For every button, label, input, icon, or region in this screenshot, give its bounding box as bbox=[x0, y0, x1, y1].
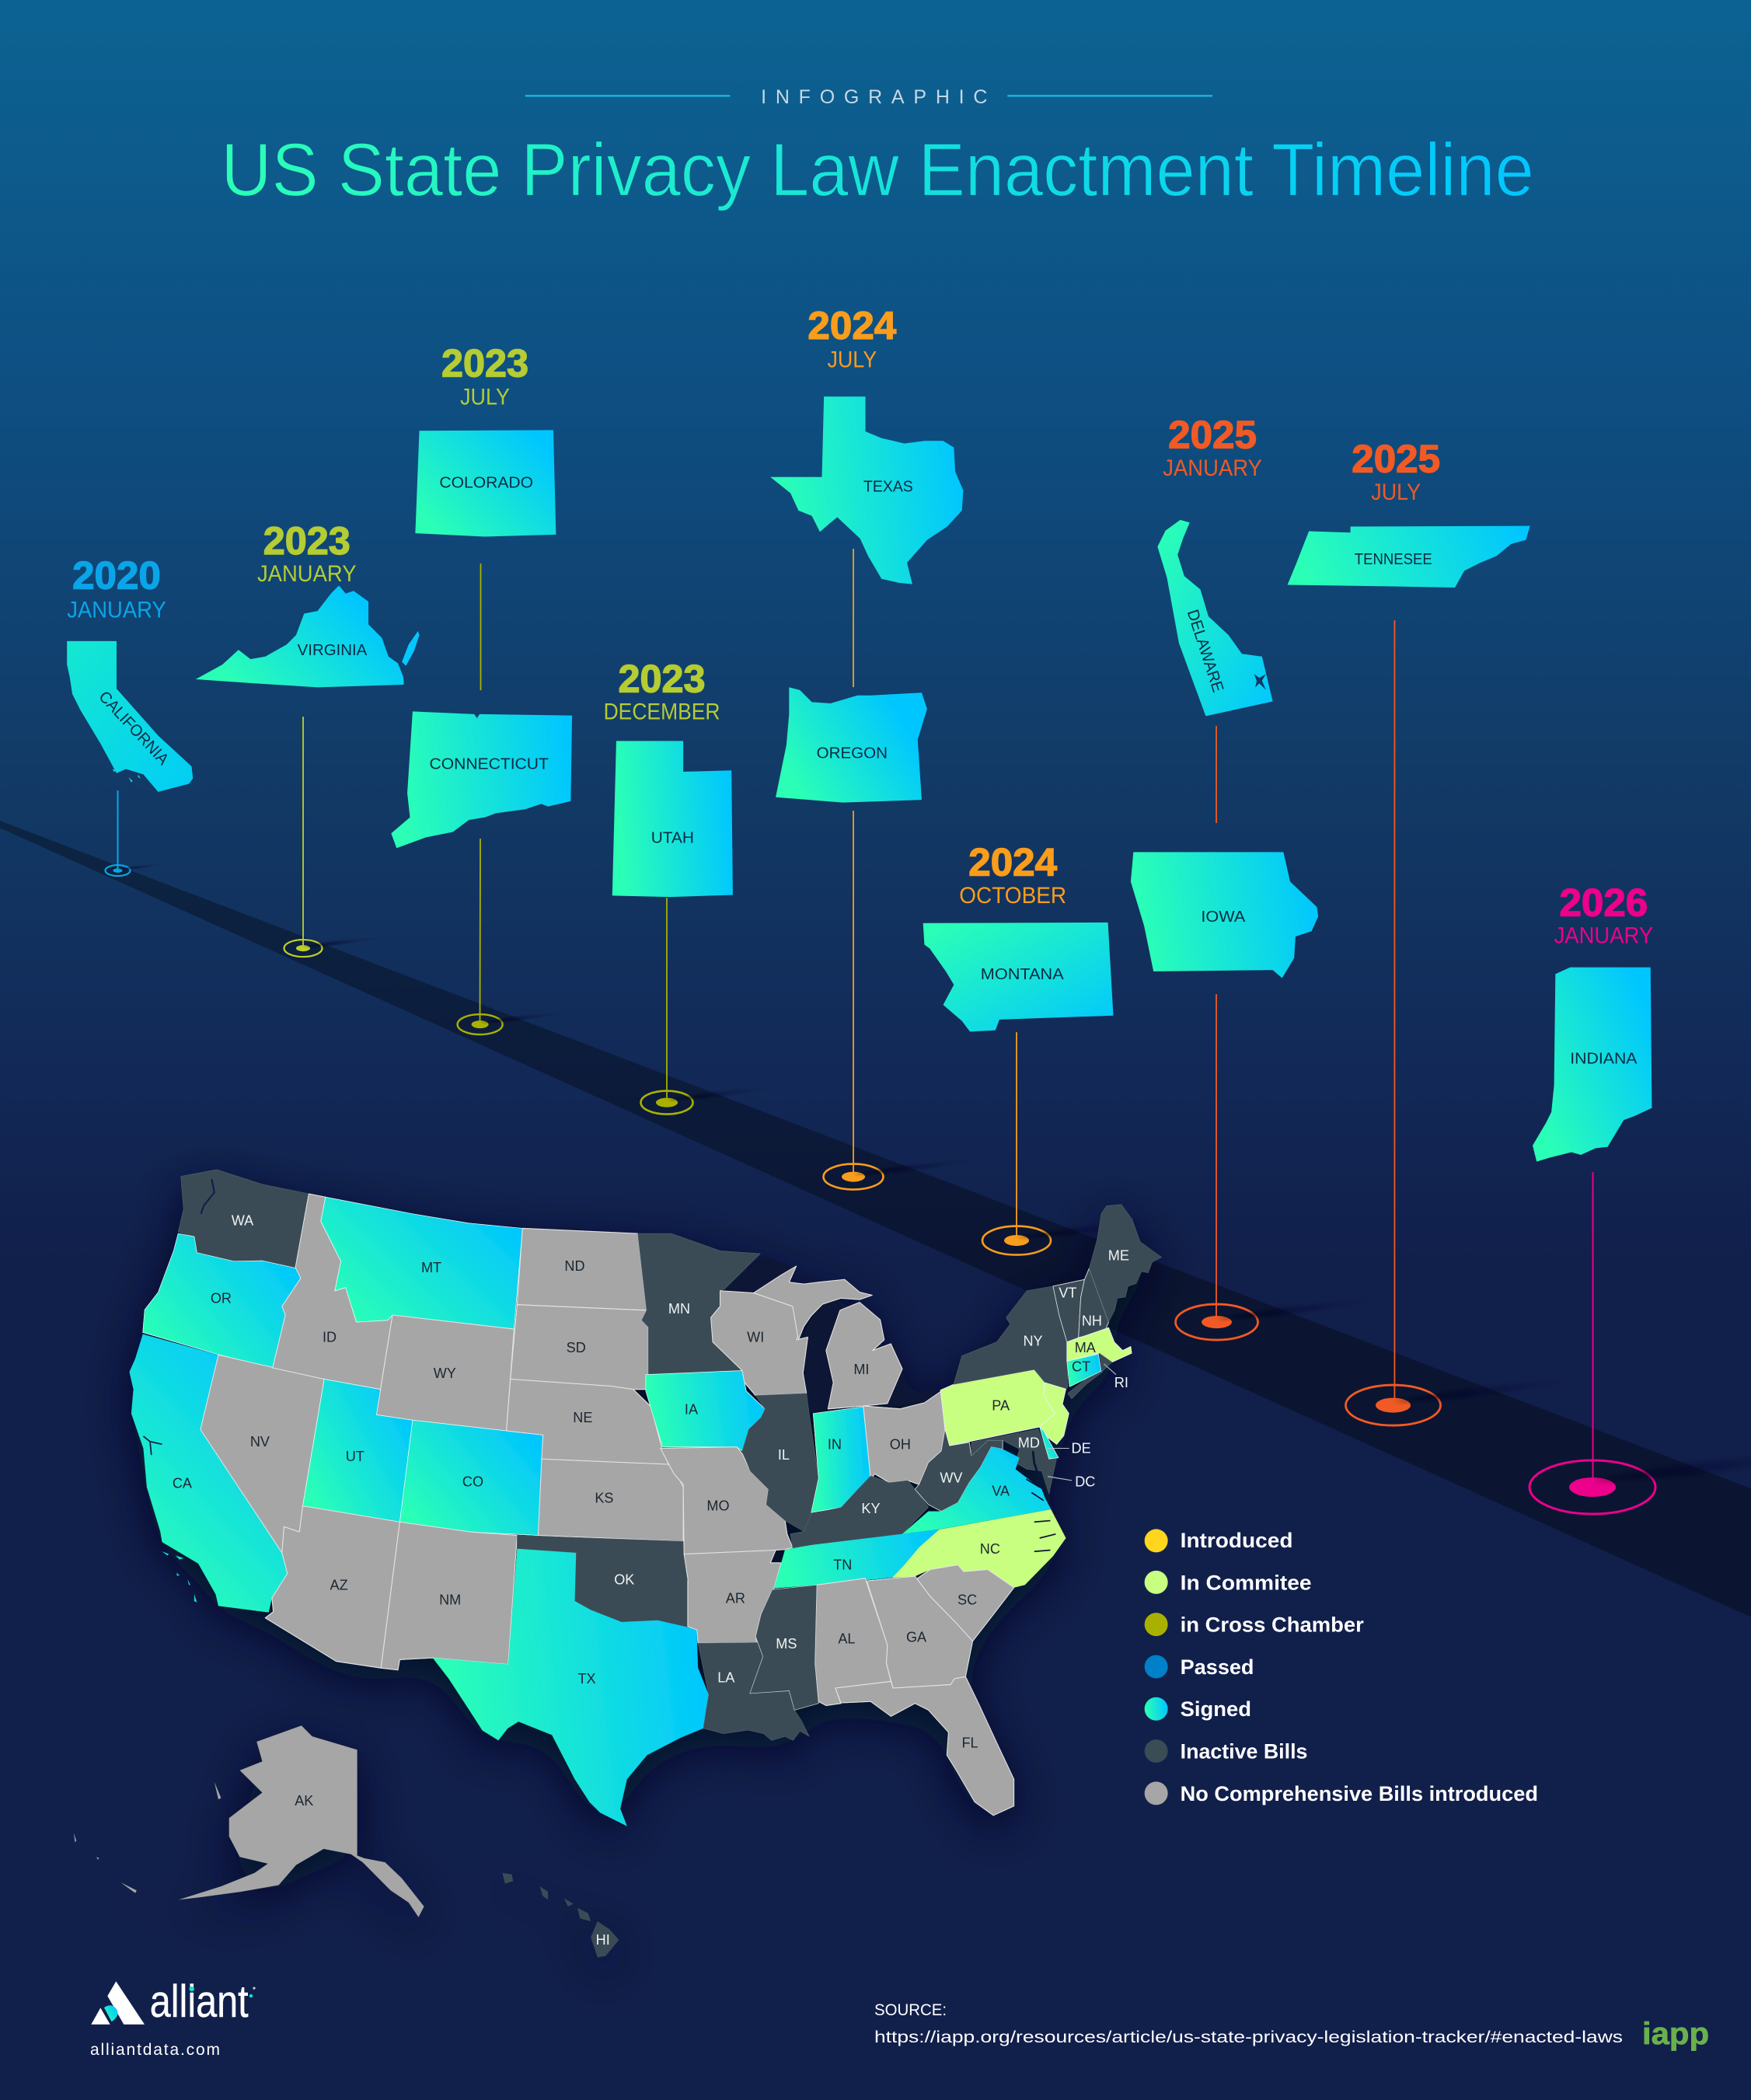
state: SD bbox=[511, 1305, 648, 1390]
state shape: Iowa bbox=[1131, 852, 1318, 978]
state: NY bbox=[954, 1286, 1103, 1399]
state: MD: MD bbox=[1018, 1435, 1040, 1451]
state: WY bbox=[376, 1315, 514, 1431]
legend bbox=[1145, 1529, 1538, 1805]
pin: Texas and Oregon 2024 bbox=[824, 549, 982, 1190]
state: MN bbox=[638, 1233, 760, 1374]
state shape: Tennessee: TENNESEE bbox=[1355, 550, 1432, 568]
state: MI: MI bbox=[853, 1362, 869, 1377]
state: SD: SD bbox=[567, 1340, 586, 1355]
source: https://iapp.org/resources/article/us-state-privacy-legislation-tracker/#enacted-laws bbox=[874, 2028, 1623, 2046]
state shape: Delaware: DELAWARE bbox=[1184, 608, 1227, 695]
state: MA bbox=[1067, 1327, 1132, 1362]
state shape: Connecticut bbox=[391, 711, 572, 848]
state: IA bbox=[646, 1371, 765, 1451]
state: FL: FL bbox=[961, 1735, 978, 1751]
year: 2024 bbox=[968, 841, 1057, 884]
month: JANUARY bbox=[257, 561, 357, 587]
state: NY: NY bbox=[1023, 1334, 1043, 1349]
state: DC bbox=[1048, 1474, 1095, 1490]
legend item: In Commitee: In Commitee bbox=[1181, 1571, 1312, 1594]
state: NC bbox=[892, 1509, 1066, 1588]
event: Colorado 2023 bbox=[415, 341, 556, 536]
state: DC: DC bbox=[1075, 1474, 1095, 1490]
state: NE: NE bbox=[573, 1410, 592, 1425]
state: MN: MN bbox=[668, 1301, 690, 1317]
event: Tennessee 2025 bbox=[1288, 438, 1530, 588]
state: AR bbox=[684, 1550, 781, 1643]
state: AK: AK bbox=[295, 1793, 313, 1809]
wordmark: alliant bbox=[150, 1976, 249, 2027]
state: FL bbox=[835, 1676, 1014, 1816]
state: NC: NC bbox=[980, 1541, 1000, 1557]
state: NV: NV bbox=[250, 1434, 270, 1449]
state: CT bbox=[1067, 1354, 1101, 1387]
state: OK: OK bbox=[614, 1572, 634, 1587]
state: UT bbox=[303, 1380, 413, 1522]
state shape: Virginia: VIRGINIA bbox=[298, 641, 368, 659]
state: AL: AL bbox=[838, 1631, 856, 1646]
state: RI: RI bbox=[1114, 1375, 1128, 1390]
state: AR: AR bbox=[726, 1591, 745, 1606]
state: WV bbox=[915, 1429, 1003, 1512]
state: ID bbox=[273, 1194, 392, 1390]
month: JULY bbox=[827, 347, 877, 372]
pin: Delaware and Iowa 2025 bbox=[1176, 726, 1387, 1340]
state shape: Colorado: COLORADO bbox=[439, 474, 533, 492]
event: Indiana 2026 bbox=[1533, 881, 1653, 1162]
year: 2026 bbox=[1559, 881, 1648, 924]
state shape: Indiana: INDIANA bbox=[1570, 1050, 1638, 1068]
timeline band bbox=[0, 821, 1751, 1617]
state: VT bbox=[1053, 1279, 1084, 1342]
event: Oregon 2024 bbox=[776, 687, 927, 803]
state: MO bbox=[661, 1447, 793, 1554]
year: 2023 bbox=[441, 341, 528, 385]
state: ND: ND bbox=[564, 1258, 585, 1274]
state: IN bbox=[811, 1407, 870, 1512]
source bbox=[874, 2001, 1623, 2046]
legend item: Introduced: Introduced bbox=[1181, 1529, 1292, 1552]
state shape: Connecticut: CONNECTICUT bbox=[429, 755, 549, 773]
state: CO bbox=[399, 1420, 543, 1536]
state: WI bbox=[711, 1291, 807, 1396]
event: Virginia 2023 bbox=[196, 519, 420, 687]
state: IL: IL bbox=[778, 1447, 790, 1463]
state shape: Delaware bbox=[1157, 520, 1273, 716]
state: NM: NM bbox=[439, 1592, 461, 1607]
state: TN bbox=[774, 1530, 939, 1589]
month: OCTOBER bbox=[959, 883, 1066, 909]
state: CO: CO bbox=[462, 1474, 483, 1490]
state: MS bbox=[750, 1585, 818, 1710]
state: GA: GA bbox=[906, 1630, 927, 1645]
state: VA: VA bbox=[992, 1484, 1010, 1499]
month: JULY bbox=[460, 385, 510, 410]
state: OK bbox=[517, 1536, 687, 1627]
month: JANUARY bbox=[67, 598, 166, 623]
state: TX: TX bbox=[577, 1671, 596, 1687]
year: 2025 bbox=[1168, 413, 1257, 457]
legend item: Passed: Passed bbox=[1181, 1655, 1254, 1679]
legend item: in Cross Chamber: in Cross Chamber bbox=[1181, 1613, 1364, 1637]
state: MS: MS bbox=[776, 1636, 797, 1652]
state: MT: MT bbox=[421, 1260, 441, 1275]
state: OR bbox=[143, 1233, 301, 1368]
state: HI: HI bbox=[596, 1932, 610, 1948]
event: Delaware 2025 bbox=[1157, 413, 1273, 716]
state: DE bbox=[1040, 1427, 1091, 1459]
state: KS bbox=[538, 1459, 683, 1541]
state: WI: WI bbox=[747, 1329, 764, 1345]
state: VA bbox=[902, 1447, 1051, 1534]
icon: wordmark accents bbox=[190, 1987, 256, 1997]
pin: Montana 2024 bbox=[982, 1032, 1162, 1255]
state: MI bbox=[754, 1266, 902, 1409]
state: KY: KY bbox=[861, 1501, 881, 1516]
event: Texas 2024 bbox=[770, 304, 963, 584]
state: ND bbox=[517, 1228, 647, 1310]
state: NH bbox=[1079, 1268, 1108, 1338]
year: 2020 bbox=[72, 554, 161, 598]
state shape: Colorado bbox=[415, 430, 556, 536]
state shape: Oregon: OREGON bbox=[817, 745, 888, 762]
state: UT: UT bbox=[346, 1449, 365, 1464]
state: TN: TN bbox=[833, 1557, 852, 1572]
source: SOURCE: bbox=[874, 2001, 947, 2019]
pin: California 2020 bbox=[106, 790, 169, 876]
logo: alliant bbox=[90, 1976, 256, 2059]
event: Iowa 2025 bbox=[1131, 852, 1318, 978]
state: AZ: AZ bbox=[330, 1577, 348, 1592]
state: AK bbox=[74, 1725, 424, 1917]
state: OR: OR bbox=[211, 1290, 232, 1306]
year: 2023 bbox=[263, 519, 351, 563]
legend item: Inactive Bills: Inactive Bills bbox=[1181, 1740, 1307, 1763]
state: PA: PA bbox=[992, 1397, 1010, 1413]
event: California 2020 bbox=[67, 554, 193, 792]
state: IN: IN bbox=[828, 1436, 842, 1452]
logo: iapp: iapp bbox=[1642, 2017, 1709, 2051]
state: SC: SC bbox=[957, 1592, 977, 1607]
state: MO: MO bbox=[706, 1498, 730, 1514]
event: Utah 2023 bbox=[604, 657, 733, 897]
state shape: Montana: MONTANA bbox=[981, 965, 1064, 983]
state: NJ bbox=[1040, 1383, 1069, 1444]
state: GA bbox=[867, 1576, 972, 1688]
month: DECEMBER bbox=[604, 699, 720, 725]
state: KY bbox=[790, 1476, 929, 1547]
state shape: Utah bbox=[612, 741, 733, 897]
state: IA: IA bbox=[685, 1402, 699, 1418]
state: RI bbox=[1100, 1353, 1128, 1390]
state shape: Tennessee bbox=[1288, 526, 1530, 588]
state: MT bbox=[321, 1197, 522, 1329]
state: PA bbox=[940, 1369, 1055, 1446]
state shape: Utah: UTAH bbox=[651, 828, 694, 846]
legend item: No Comprehensive Bills introduced: No Comprehensive Bills introduced bbox=[1181, 1782, 1538, 1805]
pin: Utah 2023 bbox=[641, 898, 778, 1115]
pin: Virginia 2023 bbox=[284, 717, 389, 957]
state: WA: WA bbox=[232, 1212, 254, 1228]
lakes bbox=[722, 1257, 938, 1415]
year: 2024 bbox=[807, 304, 896, 347]
state: WA bbox=[178, 1170, 309, 1268]
state: HI bbox=[502, 1873, 619, 1958]
state: CA: CA bbox=[173, 1475, 193, 1491]
state: WY: WY bbox=[434, 1366, 456, 1381]
state: NM bbox=[381, 1522, 517, 1670]
state shape: Oregon bbox=[776, 687, 927, 803]
month: JULY bbox=[1371, 480, 1421, 505]
state shape: California: CALIFORNIA bbox=[95, 688, 173, 769]
pin: Tennessee 2025 bbox=[1346, 620, 1590, 1425]
month: JANUARY bbox=[1554, 923, 1653, 949]
state shape: Texas: TEXAS bbox=[863, 478, 913, 496]
state shape: Indiana bbox=[1533, 968, 1652, 1162]
pin: Colorado and Connecticut 2023 bbox=[458, 563, 574, 1034]
state: OH: OH bbox=[890, 1436, 911, 1452]
legend item: Passed bbox=[1145, 1655, 1254, 1679]
legend item: Signed bbox=[1145, 1697, 1251, 1721]
state: LA: LA bbox=[717, 1669, 735, 1685]
state: IL bbox=[742, 1394, 818, 1531]
state: AL bbox=[815, 1578, 891, 1705]
state: SC bbox=[914, 1565, 1014, 1641]
state shape: Virginia bbox=[196, 585, 420, 687]
state shape: Montana bbox=[923, 923, 1113, 1031]
month: JANUARY bbox=[1163, 455, 1262, 481]
state: ME bbox=[1089, 1205, 1162, 1322]
state: NE bbox=[507, 1380, 668, 1464]
year: 2023 bbox=[619, 657, 706, 700]
website: alliantdata.com bbox=[90, 2041, 220, 2059]
state: DE: DE bbox=[1072, 1441, 1091, 1456]
state shape: California bbox=[67, 641, 193, 792]
state: LA bbox=[698, 1642, 809, 1740]
event: Montana 2024 bbox=[923, 841, 1113, 1031]
pin: Indiana 2026 bbox=[1530, 1172, 1751, 1514]
eyebrow: infographic: INFOGRAPHIC bbox=[761, 86, 987, 108]
state: AZ bbox=[265, 1506, 399, 1668]
legend item: Signed: Signed bbox=[1181, 1697, 1251, 1721]
state: WV: WV bbox=[940, 1470, 962, 1485]
event: Connecticut 2023 bbox=[391, 711, 572, 848]
state: NV bbox=[201, 1355, 324, 1553]
state: OH bbox=[863, 1391, 945, 1484]
icon: alliant mark bbox=[91, 1981, 145, 2025]
state: MD bbox=[971, 1429, 1057, 1494]
map of US states bbox=[74, 1170, 1162, 1958]
state: KS: KS bbox=[595, 1490, 613, 1505]
state: TX bbox=[433, 1549, 709, 1826]
state: MA: MA bbox=[1075, 1340, 1097, 1355]
state: ID: ID bbox=[323, 1329, 337, 1345]
state: CT: CT bbox=[1072, 1359, 1090, 1374]
state: CA bbox=[130, 1334, 288, 1613]
state: VT: VT bbox=[1059, 1285, 1076, 1301]
state: NH: NH bbox=[1082, 1313, 1102, 1329]
year: 2025 bbox=[1352, 438, 1440, 481]
state shape: Texas bbox=[770, 396, 963, 584]
title: US State Privacy Law Enactment Timeline bbox=[221, 129, 1534, 212]
state: ME: ME bbox=[1108, 1247, 1129, 1263]
state shape: Iowa: IOWA bbox=[1201, 908, 1245, 926]
